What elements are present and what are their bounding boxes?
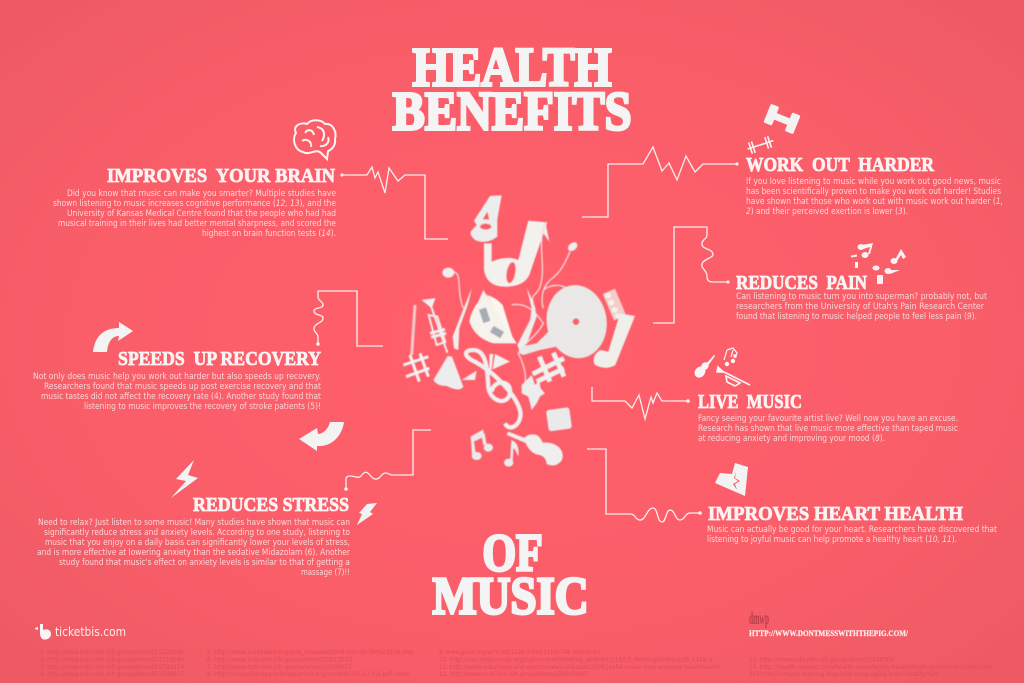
body text — [698, 414, 958, 444]
connector line — [592, 387, 690, 419]
icon: trumpet — [717, 367, 750, 386]
text: dmwp — [749, 608, 769, 628]
references column 2: 6. http://www.ncbi.nlm.nih.gov/pubmed/20013543 — [207, 656, 352, 664]
icon: broken heart — [715, 463, 748, 496]
cube — [546, 407, 572, 432]
icon: music notes — [851, 243, 906, 284]
body text: Need to relax? Just listen to some music! Many studies have shown that music can — [38, 518, 350, 528]
body text: 2) and their perceived exertion is lower (3). — [746, 207, 908, 217]
vinyl record — [519, 281, 611, 362]
violin — [507, 432, 563, 466]
heading: WORK OUT HARDER — [746, 154, 934, 176]
title: health benefits: BENEFITS — [392, 80, 632, 142]
title: health benefits — [392, 36, 632, 142]
body text: found that listening to music helped people to feel less pain (9). — [736, 312, 977, 322]
hash sign right — [533, 353, 564, 382]
icon: guitar — [692, 355, 715, 380]
references column 1: 3. http://www.ncbi.nlm.nih.gov/pubmed/19793214 — [40, 664, 184, 671]
body text: at reducing anxiety and improving your mood (8). — [698, 434, 885, 444]
references column 1: 1. http://www.ncbi.nlm.nih.gov/pubmed/15325186 — [40, 649, 184, 656]
body text — [33, 372, 322, 412]
references column 2: 7. http://www.ncbi.nlm.nih.gov/pubmed/20188971 — [207, 664, 352, 671]
speaker — [469, 290, 517, 343]
body text: music tastes did not affect the recovery rate (4). Another study found that — [41, 392, 322, 402]
earphone wires — [453, 223, 570, 393]
references column 3 — [439, 649, 720, 678]
references column 4: 13. http://www.ncbi.nlm.nih.gov/pubmed/5458304 — [749, 656, 894, 664]
treble clef — [466, 350, 521, 427]
film strip scroll — [594, 289, 635, 368]
body text — [736, 292, 988, 322]
body text: significantly reduce stress and anxiety levels. According to one study, listening to — [44, 528, 350, 538]
body text: massage (7)!! — [301, 568, 350, 578]
website url: HTTP://WWW.DONTMESSWITHTHEPIG.COM/ — [749, 628, 909, 638]
body text: and is more effective at lowering anxiety than the sedative Midazolam (6). Another — [37, 548, 350, 558]
references column 4 — [749, 656, 993, 678]
references column 1: 4. http://www.ncbi.nlm.nih.gov/pubmed/21046917 — [40, 671, 184, 678]
connector line — [582, 147, 739, 217]
body text: listening to joyful music can help promote a healthy heart (10, 11). — [707, 535, 957, 545]
icon: lightning bolt large — [171, 460, 198, 498]
title: of music: MUSIC — [432, 568, 588, 626]
panel: reduces stress — [37, 430, 431, 578]
body text: shown listening to music increases cognitive performance (12, 13), and the — [53, 199, 336, 209]
heading: SPEEDS UP RECOVERY — [118, 348, 321, 370]
body text: Can listening to music turn you into superman? probably not, but — [736, 292, 988, 302]
references column 3: 9. www.jpain.org/article/S1526-5900(11)00748-0/abstract — [439, 649, 602, 656]
references column 4: 2011/04/25/music-training-may-help-keep-aging-brain-healthy%20 — [749, 671, 939, 678]
title: health benefits: HEALTH — [412, 36, 612, 98]
panel: speeds up recovery — [33, 291, 383, 451]
logo: ticketbis: ticketbis.com — [55, 625, 126, 639]
icon: lightning bolt small — [357, 503, 377, 525]
body text: University of Kansas Medical Centre found that the people who had had — [67, 209, 336, 219]
body text: Did you know that music can make you smarter? Multiple studies have — [67, 189, 336, 199]
panel: work out harder — [582, 104, 1003, 217]
body text: Researchers found that music speeds up post exercise recovery and that — [44, 382, 322, 392]
references column 1 — [40, 649, 184, 678]
body text: Not only does music help you work out harder but also speeds up recovery. — [33, 372, 321, 382]
body text: researchers from the University of Utah's Pain Research Center — [736, 302, 984, 312]
icon: notes — [724, 348, 737, 366]
body text: music that you enjoy on a daily basis can significantly lower your levels of stress, — [45, 538, 350, 548]
body text — [37, 518, 350, 578]
connector line — [340, 167, 448, 239]
cable plugs — [453, 287, 537, 352]
connector line — [314, 291, 383, 346]
funnel — [433, 356, 463, 390]
panel: live music — [592, 348, 958, 444]
icon: curved arrow down — [299, 422, 344, 451]
earbuds — [442, 222, 579, 278]
body text: Research has shown that live music more effective than taped music — [698, 424, 958, 434]
references column 1: 2. http://www.ncbi.nlm.nih.gov/pubmed/12119586 — [40, 656, 184, 664]
single music note — [504, 440, 519, 467]
trumpet — [424, 299, 447, 353]
references column 2 — [207, 649, 413, 678]
references column 3: 12. http://www.ncbi.nlm.nih.gov/pubmed/20945993 — [439, 671, 587, 678]
body text: study found that music's effect on anxiety levels is similar to that of getting a — [59, 558, 350, 568]
connector line — [587, 449, 702, 522]
references column 4: 14. http://health.usnews.com/health-news/family-health/brain-and-behavior/articles/ — [749, 664, 993, 671]
references column 3: 11. http://umm.edu/news-and-events/news-releases/2008/joyful-music-may-promote-heart-health — [439, 664, 720, 671]
body text: musical training in their lives had better mental sharpness, and scored the — [58, 219, 336, 229]
panel: improves your brain — [53, 120, 448, 239]
body text — [707, 525, 998, 545]
ribbon note — [470, 195, 547, 287]
heading: REDUCES STRESS — [193, 494, 349, 516]
icon: brain — [294, 120, 336, 159]
body text: highest on brain function tests (14). — [202, 229, 336, 239]
double music note — [471, 429, 493, 460]
icon: dumbbell — [763, 104, 801, 134]
heading: LIVE MUSIC — [698, 391, 802, 413]
pen needle — [412, 305, 415, 355]
hash sign left — [403, 353, 429, 382]
references column 2: 5. http://www.eurekalert.org/pub_releases/2008-02/uob-lfm021508.php — [207, 649, 413, 656]
connector line — [344, 430, 431, 491]
body text: listening to music improves the recovery of stroke patients (5)! — [84, 402, 321, 412]
references column 2: 8. http://musictherapy.oxfordjournals.org/content/3/1/17.full.pdf+html — [207, 671, 410, 678]
zigzag wave — [522, 375, 545, 410]
body text — [746, 177, 1003, 217]
heading: IMPROVES YOUR BRAIN — [107, 165, 335, 187]
body text: have shown that those who work out with music work out harder (1, — [746, 197, 1003, 207]
body text — [53, 189, 336, 239]
panel: reduces pain — [653, 227, 988, 323]
title: of music — [432, 524, 588, 626]
body text: Fancy seeing your favourite artist live? Well now you have an excuse. — [698, 414, 958, 424]
play triangle — [489, 354, 510, 369]
icon: barbell — [746, 135, 775, 155]
heading: IMPROVES HEART HEALTH — [708, 503, 963, 525]
title: of music: OF — [482, 524, 542, 582]
icon: curved arrow up — [93, 322, 133, 352]
connector line — [653, 227, 730, 323]
heading: REDUCES PAIN — [736, 272, 867, 294]
panel: improves heart health — [587, 449, 998, 545]
central music objects illustration — [403, 195, 635, 467]
logo: ticketbis — [35, 624, 126, 640]
references column 3: 10. http://circ.ahajournals.org/cgi/content/meeting_abstract/118/18_MeetingAbstracts/S_1148-a — [439, 656, 712, 664]
